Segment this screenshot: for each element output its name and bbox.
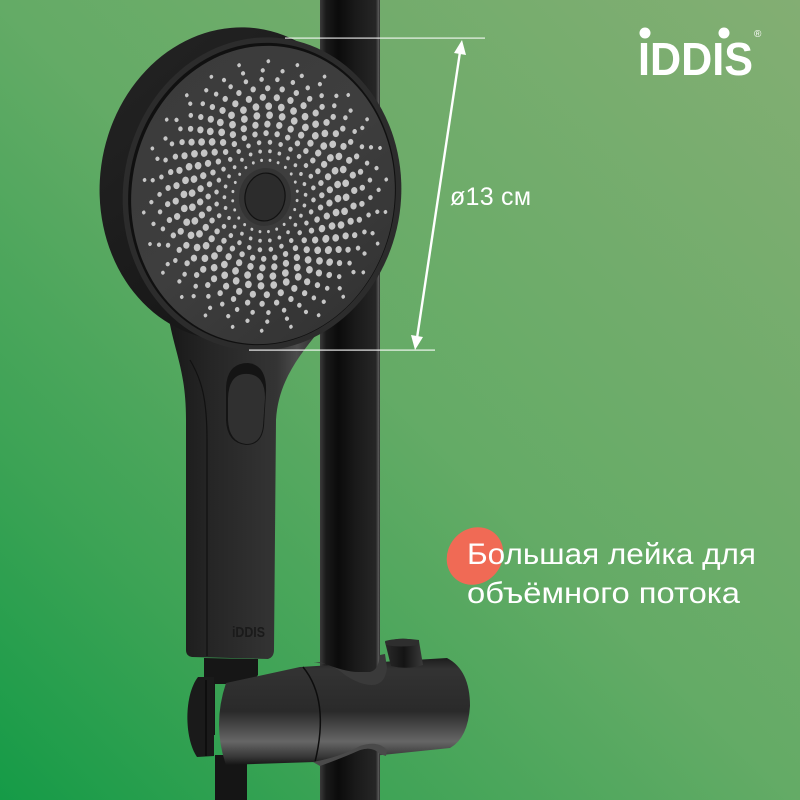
clamp knob: [385, 639, 423, 668]
logo: ®: [754, 29, 762, 40]
rail collar bottom: [313, 744, 387, 766]
hose: [215, 755, 247, 800]
handle button: [226, 363, 266, 445]
neck below handle: [204, 658, 258, 735]
clamp body: [219, 658, 470, 765]
clamp left disc: [187, 677, 214, 757]
caption: объёмного потока: [467, 577, 740, 610]
head back shell: [79, 10, 393, 358]
accent blob: [435, 516, 515, 596]
logo: IDDIS: [638, 33, 753, 85]
shower head: [71, 0, 459, 406]
engraved logo on handle: iDDIS: [232, 624, 265, 641]
rail below clamp: [320, 748, 380, 800]
spray nozzles: [71, 0, 459, 406]
dimension line top: [285, 38, 485, 39]
rail collar top: [313, 654, 387, 685]
dimension line bottom: [249, 350, 435, 351]
rail above collar: [320, 650, 380, 672]
clamp seam: [303, 667, 320, 762]
diameter label: ø13 см: [450, 183, 531, 211]
caption: Большая лейка для: [467, 538, 756, 571]
shower rail: [320, 0, 380, 800]
centre button: [235, 165, 295, 229]
diameter arrow: [411, 40, 466, 350]
wall clamp: [187, 639, 470, 800]
spray plate: [112, 29, 414, 361]
caption: [467, 538, 756, 610]
shower head handle: [166, 300, 320, 659]
head front rim: [103, 19, 421, 369]
